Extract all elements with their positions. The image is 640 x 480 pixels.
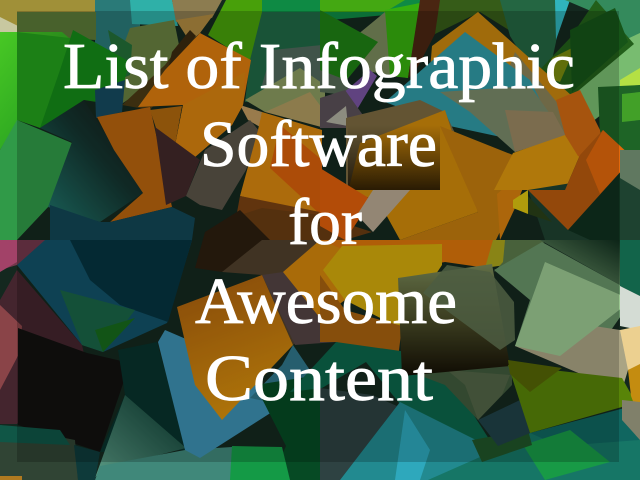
title line 4: Awesome	[195, 265, 457, 338]
title line 1: List of Infographic	[63, 30, 575, 103]
title line 3: for	[288, 186, 362, 259]
title	[63, 30, 575, 415]
title line 5: Content	[205, 342, 433, 415]
title line 2: Software	[200, 108, 437, 181]
